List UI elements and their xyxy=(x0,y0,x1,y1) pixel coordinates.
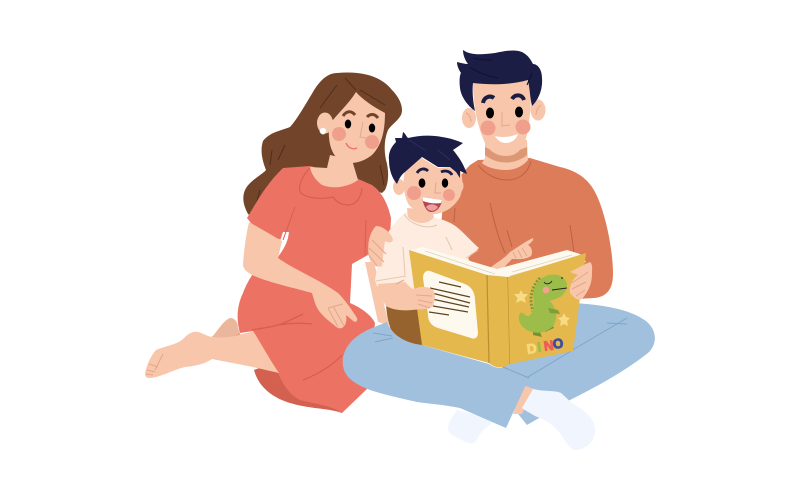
dinosaur xyxy=(519,275,567,337)
woman cheeks xyxy=(332,127,379,149)
woman hair strands xyxy=(256,78,385,205)
dino face lines xyxy=(544,281,567,290)
man ear lines xyxy=(466,105,541,122)
man face xyxy=(473,80,531,156)
book title: D xyxy=(526,341,538,357)
man far leg xyxy=(500,303,655,425)
man smile xyxy=(495,134,518,143)
book title: O xyxy=(552,336,564,352)
woman smile xyxy=(346,143,357,149)
woman nose xyxy=(360,122,366,138)
stars xyxy=(514,290,570,326)
boy face xyxy=(404,157,462,214)
book xyxy=(409,247,586,367)
man hair strands xyxy=(470,58,532,85)
woman face xyxy=(329,92,385,163)
woman dress xyxy=(238,166,391,413)
woman hair xyxy=(243,73,402,225)
boy collar xyxy=(404,214,437,227)
right cover xyxy=(508,253,586,364)
boy nose xyxy=(435,182,441,193)
boy shorts xyxy=(386,300,424,347)
woman ear xyxy=(317,112,333,134)
woman far arm behind boy xyxy=(365,262,389,325)
dress collar xyxy=(300,168,362,205)
book pages xyxy=(410,247,586,285)
book title: I xyxy=(536,340,542,355)
boy neck xyxy=(407,208,434,223)
boy hand holding book xyxy=(378,280,435,310)
dino arm xyxy=(548,308,560,314)
man ears xyxy=(462,100,546,128)
man eyes xyxy=(486,106,523,118)
man eyebrows xyxy=(483,95,524,103)
dress hem shadow xyxy=(254,360,345,413)
man nose xyxy=(502,112,510,126)
woman neck xyxy=(310,155,358,187)
man cheeks xyxy=(480,120,530,136)
woman back foot xyxy=(212,318,241,340)
man hair xyxy=(457,50,542,111)
woman near arm xyxy=(243,222,357,328)
man neck and collar xyxy=(454,140,574,253)
boy mouth xyxy=(422,197,442,212)
boy pointing arm xyxy=(490,238,533,277)
woman eyebrows xyxy=(343,112,378,118)
man torso xyxy=(440,158,613,300)
woman toes xyxy=(146,354,163,375)
man head xyxy=(457,50,546,156)
dress main xyxy=(238,166,391,413)
woman eyes xyxy=(345,120,375,132)
boy eyes xyxy=(419,178,448,188)
dino feet xyxy=(533,323,554,337)
dino spikes xyxy=(529,278,540,318)
earring xyxy=(320,128,326,134)
boy hair strands xyxy=(409,140,450,160)
boy cheeks xyxy=(407,186,455,201)
woman hand on boy shoulder xyxy=(368,226,393,267)
dino eye xyxy=(561,277,563,279)
book title: N xyxy=(543,338,555,354)
boy eyebrows xyxy=(417,169,452,175)
boy body xyxy=(375,132,533,347)
gap between arm and dress xyxy=(277,232,289,258)
woman head and neck xyxy=(310,92,385,187)
dino cheek xyxy=(543,287,549,293)
boy shirt xyxy=(375,212,480,290)
man right sock xyxy=(522,389,595,450)
dress folds xyxy=(252,314,342,380)
book label xyxy=(423,271,478,339)
dino body xyxy=(519,275,567,333)
boy hair xyxy=(389,132,467,184)
spine xyxy=(487,275,510,367)
label text lines xyxy=(429,282,470,315)
man ankle xyxy=(513,385,534,414)
left cover xyxy=(409,250,489,363)
boy ears xyxy=(393,179,464,195)
woman front leg xyxy=(145,331,279,378)
man near leg xyxy=(343,322,529,428)
man left sock xyxy=(448,410,495,444)
book title xyxy=(526,336,564,357)
man hand on book xyxy=(570,262,592,300)
